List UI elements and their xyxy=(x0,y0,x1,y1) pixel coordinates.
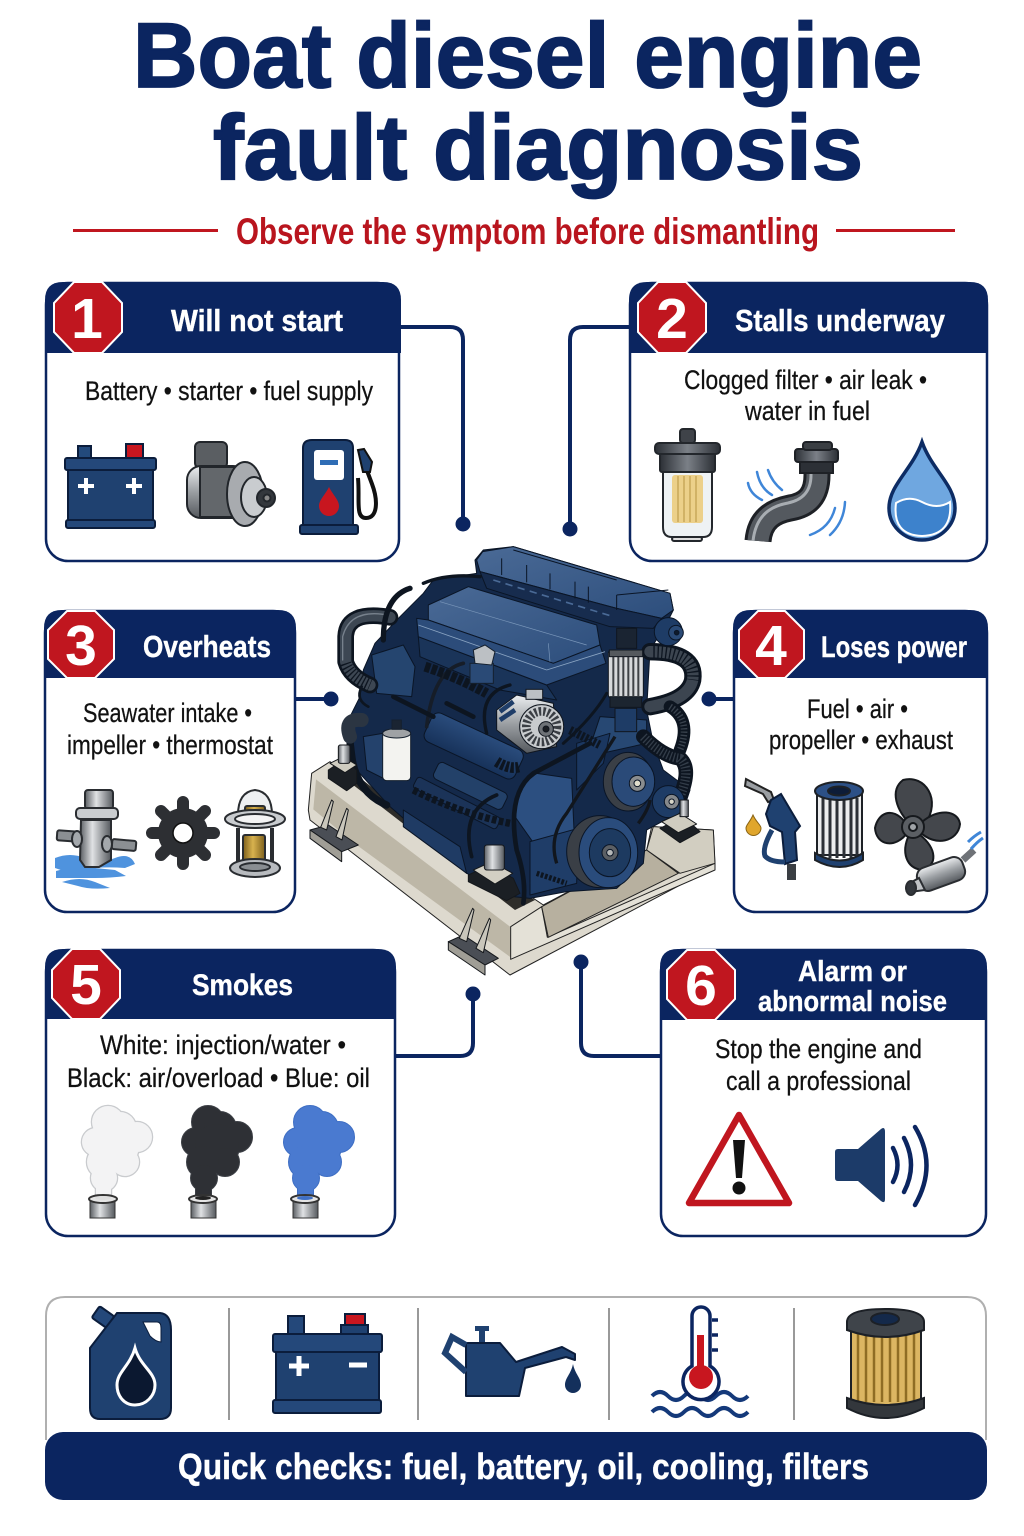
icon: seawater intake xyxy=(55,790,136,889)
block side panels xyxy=(363,637,647,895)
water pump cap xyxy=(654,618,683,646)
title: fault diagnosis xyxy=(213,97,863,199)
drive belt xyxy=(554,737,650,863)
body 5: Black: air/overload • Blue: oil xyxy=(67,1063,370,1093)
badge 3 xyxy=(48,611,114,678)
engine block silhouette xyxy=(350,547,690,898)
connector: panel 6 to engine xyxy=(574,954,660,1056)
icon: battery xyxy=(65,444,156,528)
body 4: Fuel • air • xyxy=(807,694,908,724)
quick checks banner: Quick checks: fuel, battery, oil, cooling, filters xyxy=(178,1446,869,1487)
body 5 xyxy=(67,1030,370,1093)
badge 2 xyxy=(638,282,706,353)
panel 5: smokes xyxy=(45,949,396,1236)
icon: speaker xyxy=(835,1127,926,1205)
front valve cover xyxy=(417,587,606,685)
body 6: Stop the engine and xyxy=(715,1034,922,1064)
icon: air filter xyxy=(815,782,863,867)
heading 1: Will not start xyxy=(171,303,343,338)
icon: black smoke xyxy=(182,1106,252,1218)
ribbed oil filter xyxy=(608,628,643,732)
body 3: Seawater intake • xyxy=(83,698,252,728)
body 4 xyxy=(769,694,953,755)
side pulley xyxy=(652,786,684,818)
connector: panel 4 to engine xyxy=(702,692,733,706)
panel 1 header xyxy=(45,282,401,353)
icon: exhaust muffler xyxy=(906,832,983,895)
heading 6: Alarm or xyxy=(798,956,907,988)
connector: panel 3 to engine xyxy=(296,692,338,706)
connector: panel 1 to engine xyxy=(400,327,470,532)
icon: blue smoke xyxy=(284,1106,354,1218)
badge 5 xyxy=(52,949,120,1019)
badge 6: 6 xyxy=(685,954,717,1018)
connector: panel 5 to engine xyxy=(396,986,480,1056)
subtitle: Observe the symptom before dismantling xyxy=(236,211,819,252)
heading 4: Loses power xyxy=(821,631,967,664)
white fuel filter xyxy=(383,720,411,781)
icon: oil can xyxy=(445,1326,581,1396)
badge 6 xyxy=(667,950,735,1020)
icon: water drop xyxy=(889,442,955,540)
panel 3: overheats xyxy=(44,610,296,912)
icon: leaking pipe xyxy=(748,442,845,541)
engine illustration xyxy=(308,547,715,975)
icon: white smoke xyxy=(82,1106,152,1218)
icon: oil filter xyxy=(847,1309,924,1418)
rear valve cover xyxy=(477,547,673,628)
body 6 xyxy=(715,1034,922,1096)
panel 6 header xyxy=(660,949,987,1020)
icon: fuel filter xyxy=(655,429,720,541)
panel 4: loses power xyxy=(733,610,988,912)
panel 3 header xyxy=(44,610,296,678)
icon: starter motor xyxy=(187,442,275,526)
badge 5: 5 xyxy=(70,953,102,1017)
icon: fuel pump xyxy=(300,440,376,534)
body 2: water in fuel xyxy=(744,396,870,426)
panel 1: will not start xyxy=(45,282,401,561)
panel 2 header xyxy=(629,282,988,353)
icon: thermostat xyxy=(225,790,285,877)
body 1: Battery • starter • fuel supply xyxy=(85,376,373,406)
panel 5 header xyxy=(45,949,396,1019)
small metal fitting xyxy=(470,645,495,683)
heading 6 xyxy=(758,956,947,1018)
title: Boat diesel engine xyxy=(133,5,922,107)
body 3 xyxy=(67,698,273,760)
connector: panel 2 to engine xyxy=(562,327,629,536)
heading 6: abnormal noise xyxy=(758,986,947,1018)
icon: thermometer in water xyxy=(652,1307,748,1416)
panel 2: stalls underway xyxy=(629,282,988,561)
icon: fuel nozzle xyxy=(745,779,800,880)
heading 5: Smokes xyxy=(192,969,293,1002)
body 2 xyxy=(684,365,927,426)
quick checks banner xyxy=(45,1432,987,1500)
body 4: propeller • exhaust xyxy=(769,725,953,755)
badge 4: 4 xyxy=(755,614,787,678)
body 3: impeller • thermostat xyxy=(67,730,273,760)
body 6: call a professional xyxy=(726,1066,911,1096)
icon: battery xyxy=(273,1314,382,1413)
icon: impeller gear xyxy=(152,802,214,864)
corner brackets xyxy=(310,800,498,975)
badge 1: 1 xyxy=(71,287,103,351)
badge 4 xyxy=(739,611,804,678)
corrugated hoses xyxy=(343,576,693,903)
body 2: Clogged filter • air leak • xyxy=(684,365,927,395)
lower pulley xyxy=(567,816,638,888)
base frame xyxy=(308,762,715,975)
heading 3: Overheats xyxy=(143,629,271,664)
body 5: White: injection/water • xyxy=(100,1030,346,1060)
alternator xyxy=(497,689,564,753)
badge 3: 3 xyxy=(65,614,97,678)
panel: quick checks xyxy=(45,1297,987,1500)
icon: propeller xyxy=(875,779,960,870)
icon: warning triangle xyxy=(689,1115,789,1203)
panel 6: alarm or abnormal noise xyxy=(660,949,987,1236)
icon: oil jug xyxy=(90,1306,171,1419)
panel 4 header xyxy=(733,610,988,678)
engine mounts xyxy=(328,745,700,901)
upper pulley xyxy=(603,752,655,811)
badge 1 xyxy=(54,282,122,353)
badge 2: 2 xyxy=(656,287,688,351)
heading 2: Stalls underway xyxy=(735,303,946,338)
title xyxy=(133,5,922,199)
